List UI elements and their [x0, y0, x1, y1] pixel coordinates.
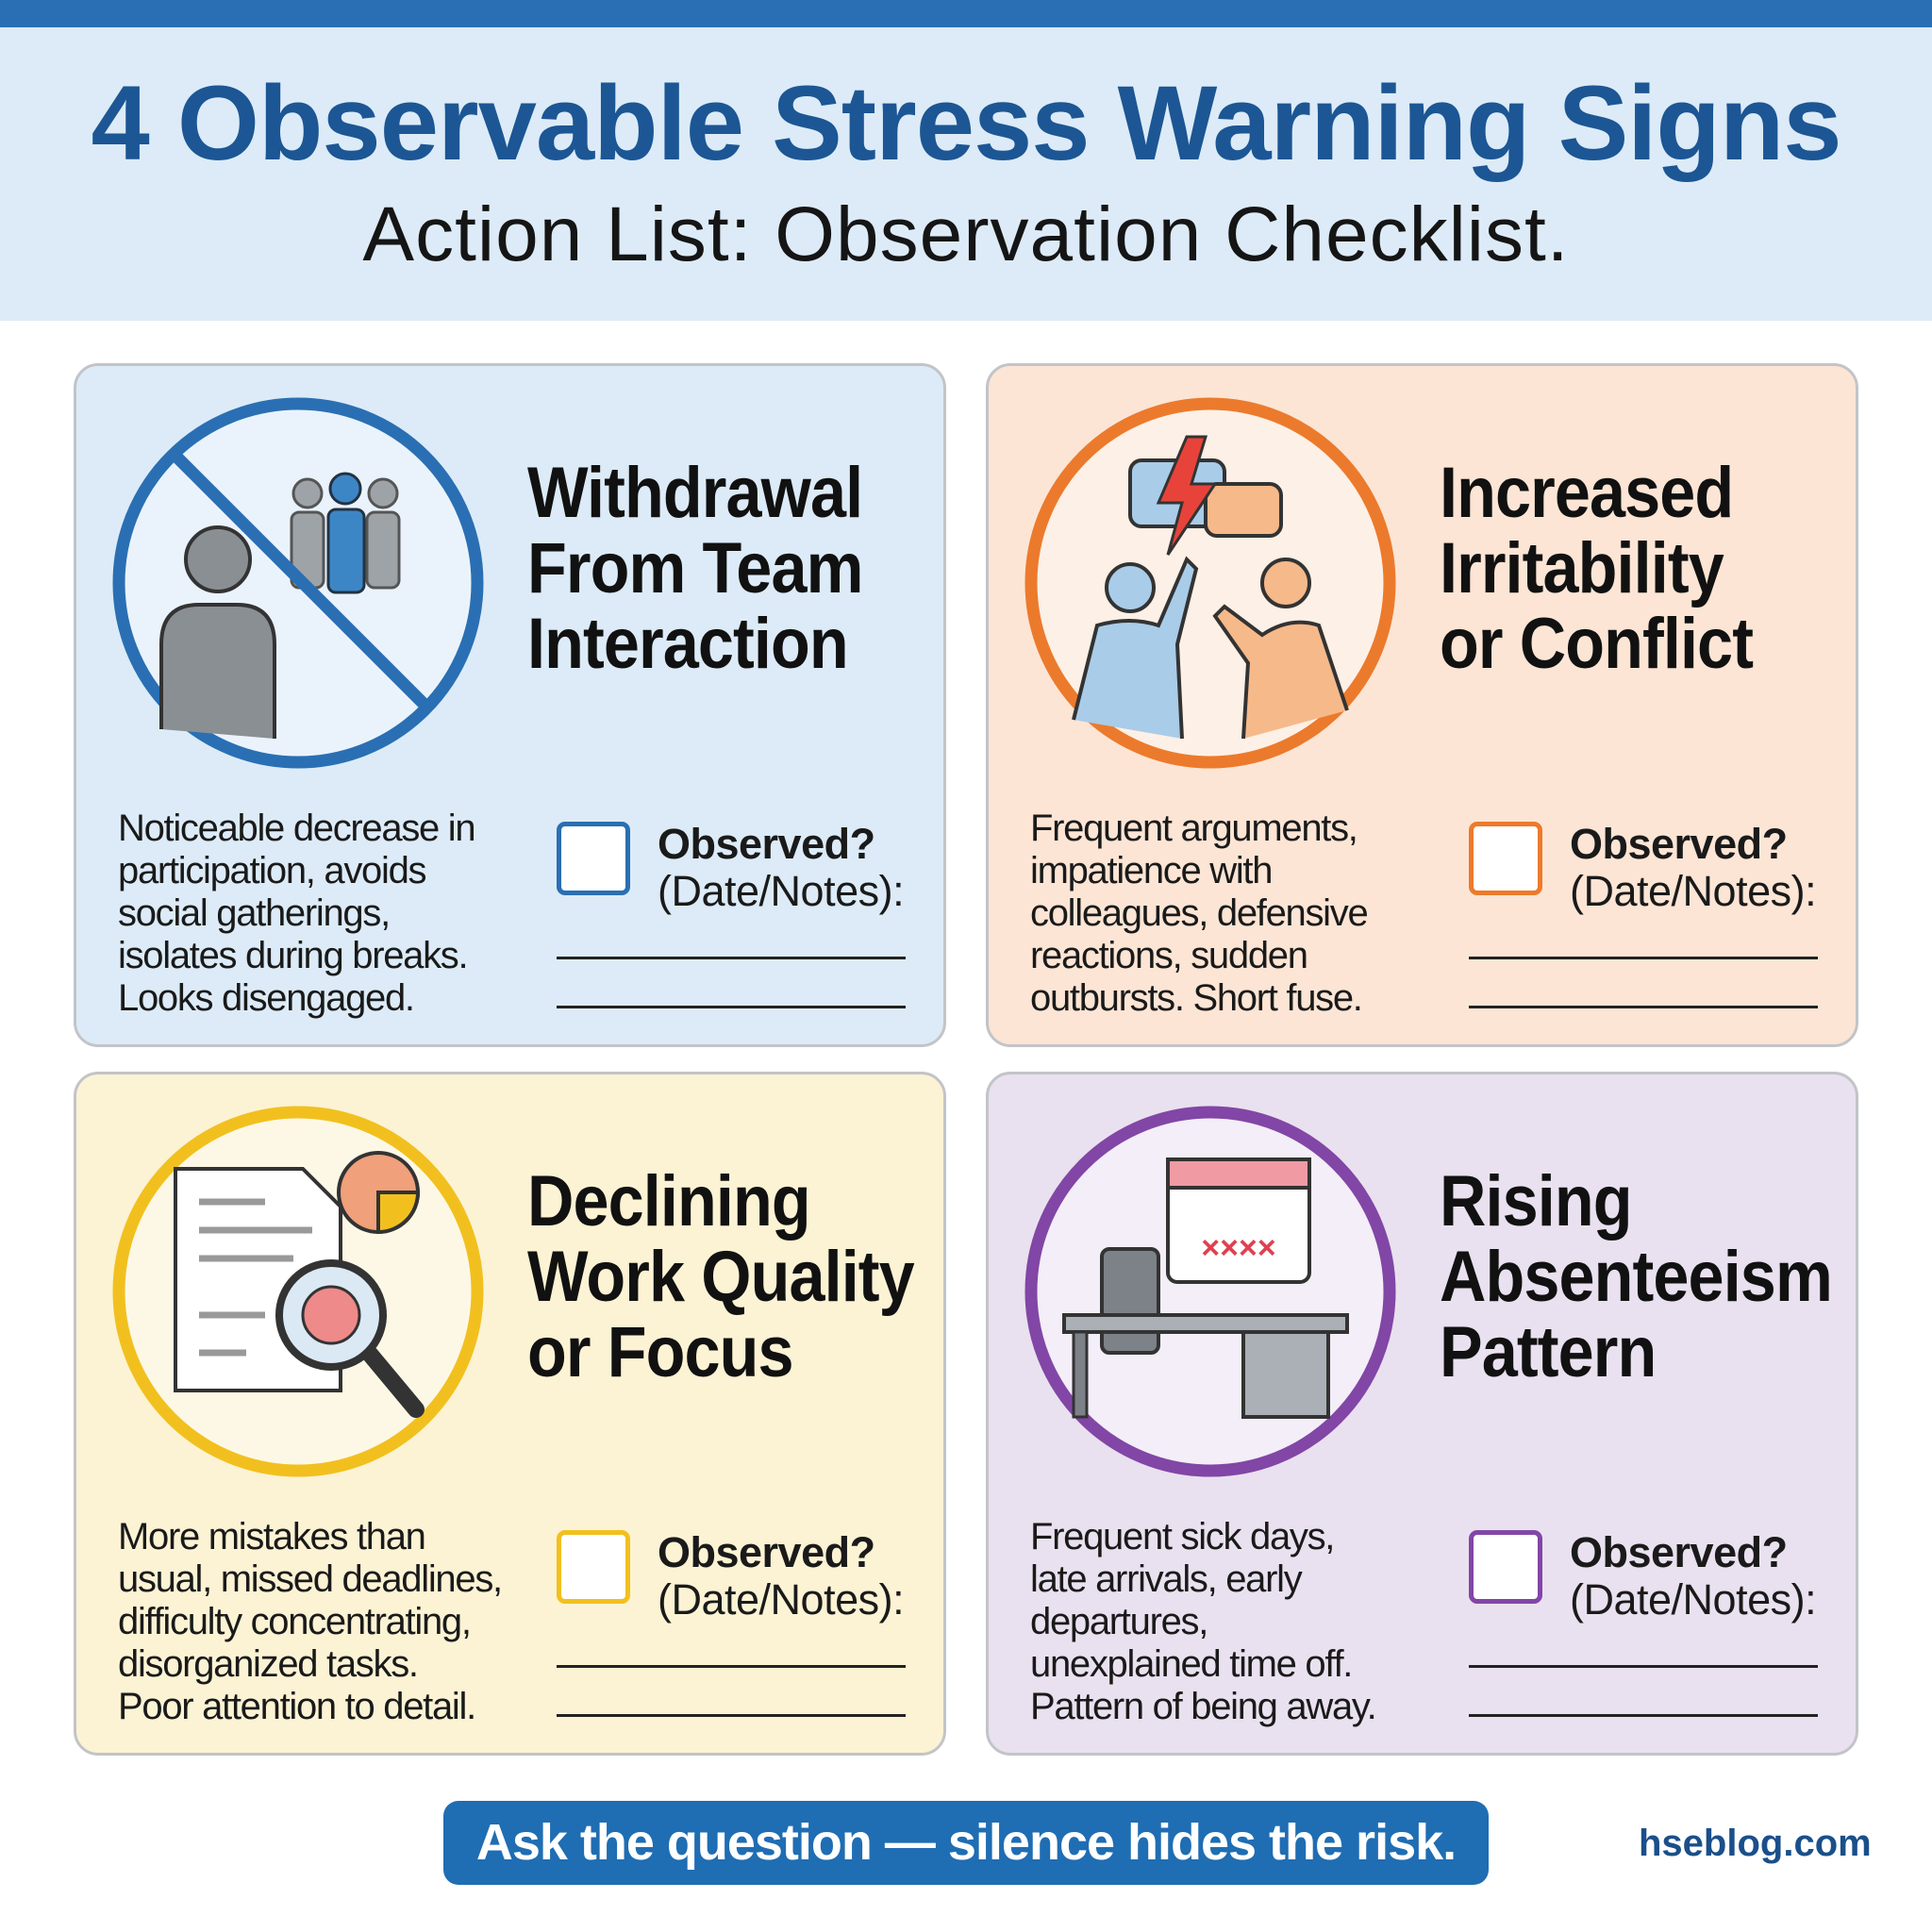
panel: withdrawal	[74, 363, 946, 1047]
description: Poor attention to detail.	[118, 1686, 475, 1727]
description	[1030, 1516, 1375, 1727]
title: 4 Observable Stress Warning Signs	[91, 64, 1841, 182]
heading	[527, 453, 863, 684]
checkbox	[1469, 822, 1542, 895]
description: outbursts. Short fuse.	[1030, 977, 1362, 1019]
panel: work quality	[74, 1072, 946, 1756]
observed label: (Date/Notes):	[658, 867, 904, 915]
checkbox	[557, 822, 630, 895]
observed label: Observed?	[658, 820, 875, 868]
subtitle: Action List: Observation Checklist.	[362, 192, 1570, 277]
heading	[1440, 453, 1753, 684]
description: Pattern of being away.	[1030, 1686, 1375, 1727]
heading: Work Quality	[527, 1237, 914, 1317]
heading: or Focus	[527, 1312, 793, 1392]
heading: Interaction	[527, 604, 848, 684]
heading: Absenteeism	[1440, 1237, 1832, 1317]
observed label: Observed?	[1570, 1528, 1788, 1576]
icon: empty desk calendar: ××××	[1201, 1230, 1276, 1266]
icon: conflict	[1024, 398, 1396, 768]
observed label	[658, 820, 904, 915]
observed label: Observed?	[1570, 820, 1788, 868]
checkbox	[557, 1530, 630, 1604]
observed label: (Date/Notes):	[1570, 867, 1816, 915]
description: participation, avoids	[118, 850, 425, 891]
description	[1030, 808, 1367, 1019]
heading: or Conflict	[1440, 604, 1753, 684]
heading: Declining	[527, 1161, 810, 1241]
observed label: (Date/Notes):	[658, 1575, 904, 1624]
panel: irritability	[986, 363, 1858, 1047]
panel: absenteeism	[986, 1072, 1858, 1756]
icon: no group	[113, 398, 483, 768]
description: difficulty concentrating,	[118, 1601, 471, 1642]
description: impatience with	[1030, 850, 1272, 891]
description: late arrivals, early	[1030, 1558, 1301, 1600]
description: Frequent sick days,	[1030, 1516, 1334, 1557]
description: More mistakes than	[118, 1516, 425, 1557]
description: reactions, sudden	[1030, 935, 1307, 976]
callout: footer message	[443, 1801, 1489, 1885]
description: departures,	[1030, 1601, 1208, 1642]
observed label	[1570, 1528, 1816, 1624]
description: Looks disengaged.	[118, 977, 414, 1019]
observed label: (Date/Notes):	[1570, 1575, 1816, 1624]
callout: footer message: Ask the question — silence hides the risk.	[476, 1814, 1456, 1871]
description: unexplained time off.	[1030, 1643, 1352, 1685]
observed label	[1570, 820, 1816, 915]
description	[118, 808, 475, 1019]
heading: Rising	[1440, 1161, 1632, 1241]
description: isolates during breaks.	[118, 935, 467, 976]
heading	[1440, 1161, 1832, 1392]
heading: Pattern	[1440, 1312, 1656, 1392]
description: Noticeable decrease in	[118, 808, 475, 849]
description: Frequent arguments,	[1030, 808, 1357, 849]
observed label: Observed?	[658, 1528, 875, 1576]
icon: document magnifier	[113, 1106, 483, 1477]
description: disorganized tasks.	[118, 1643, 418, 1685]
site credit: hseblog.com	[1639, 1823, 1872, 1864]
description: social gatherings,	[118, 892, 390, 934]
icon: empty desk calendar	[1024, 1106, 1396, 1477]
heading: Irritability	[1440, 528, 1724, 608]
checkbox	[1469, 1530, 1542, 1604]
description	[118, 1516, 502, 1727]
observed label	[658, 1528, 904, 1624]
heading: From Team	[527, 528, 863, 608]
heading: Increased	[1440, 453, 1733, 533]
heading	[527, 1161, 915, 1392]
description: usual, missed deadlines,	[118, 1558, 502, 1600]
heading: Withdrawal	[527, 453, 862, 533]
description: colleagues, defensive	[1030, 892, 1367, 934]
